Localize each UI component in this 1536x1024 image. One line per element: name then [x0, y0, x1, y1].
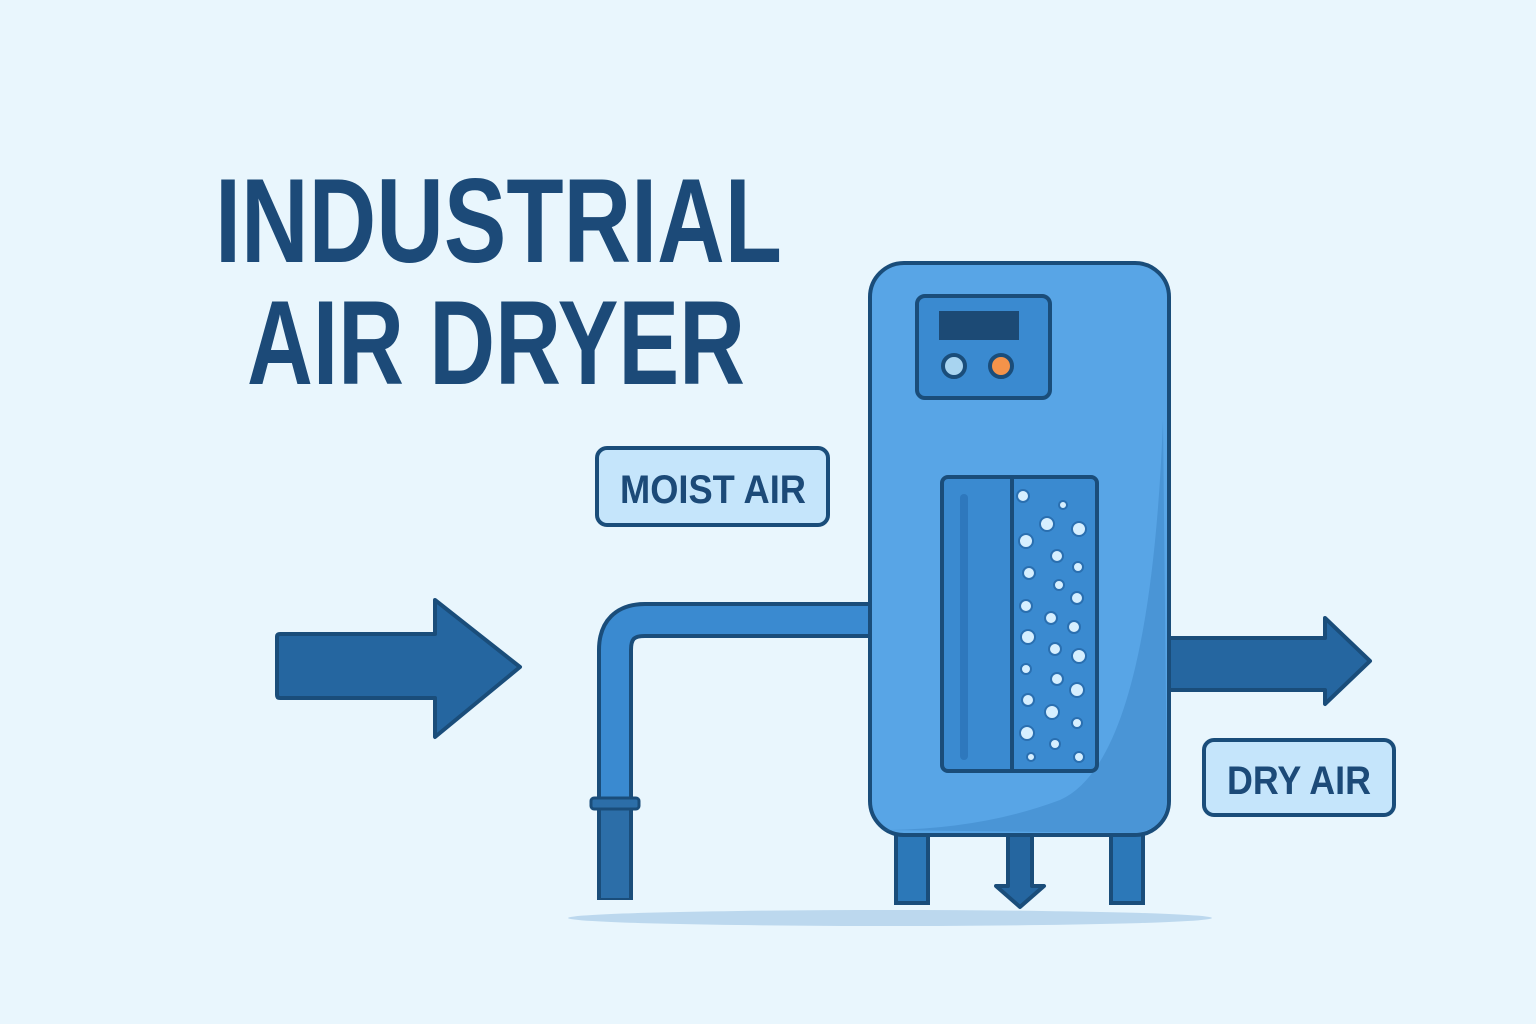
- shadow: [568, 910, 1212, 926]
- label: moist air: [597, 448, 828, 525]
- title: AIR DRYER: [247, 276, 745, 410]
- pipe: [591, 620, 872, 900]
- dryer unit: [870, 263, 1169, 835]
- arrow: moist air input: [277, 600, 520, 737]
- title: [215, 154, 782, 410]
- control panel: [917, 296, 1050, 398]
- label: dry air: DRY AIR: [1227, 759, 1371, 803]
- label: moist air: MOIST AIR: [620, 468, 806, 512]
- legs: [896, 830, 1143, 903]
- drain arrow: [996, 830, 1044, 907]
- arrow: dry air output: [1168, 618, 1370, 704]
- label: dry air: [1204, 740, 1394, 815]
- filter cartridge: [942, 477, 1097, 771]
- title: INDUSTRIAL: [215, 154, 782, 288]
